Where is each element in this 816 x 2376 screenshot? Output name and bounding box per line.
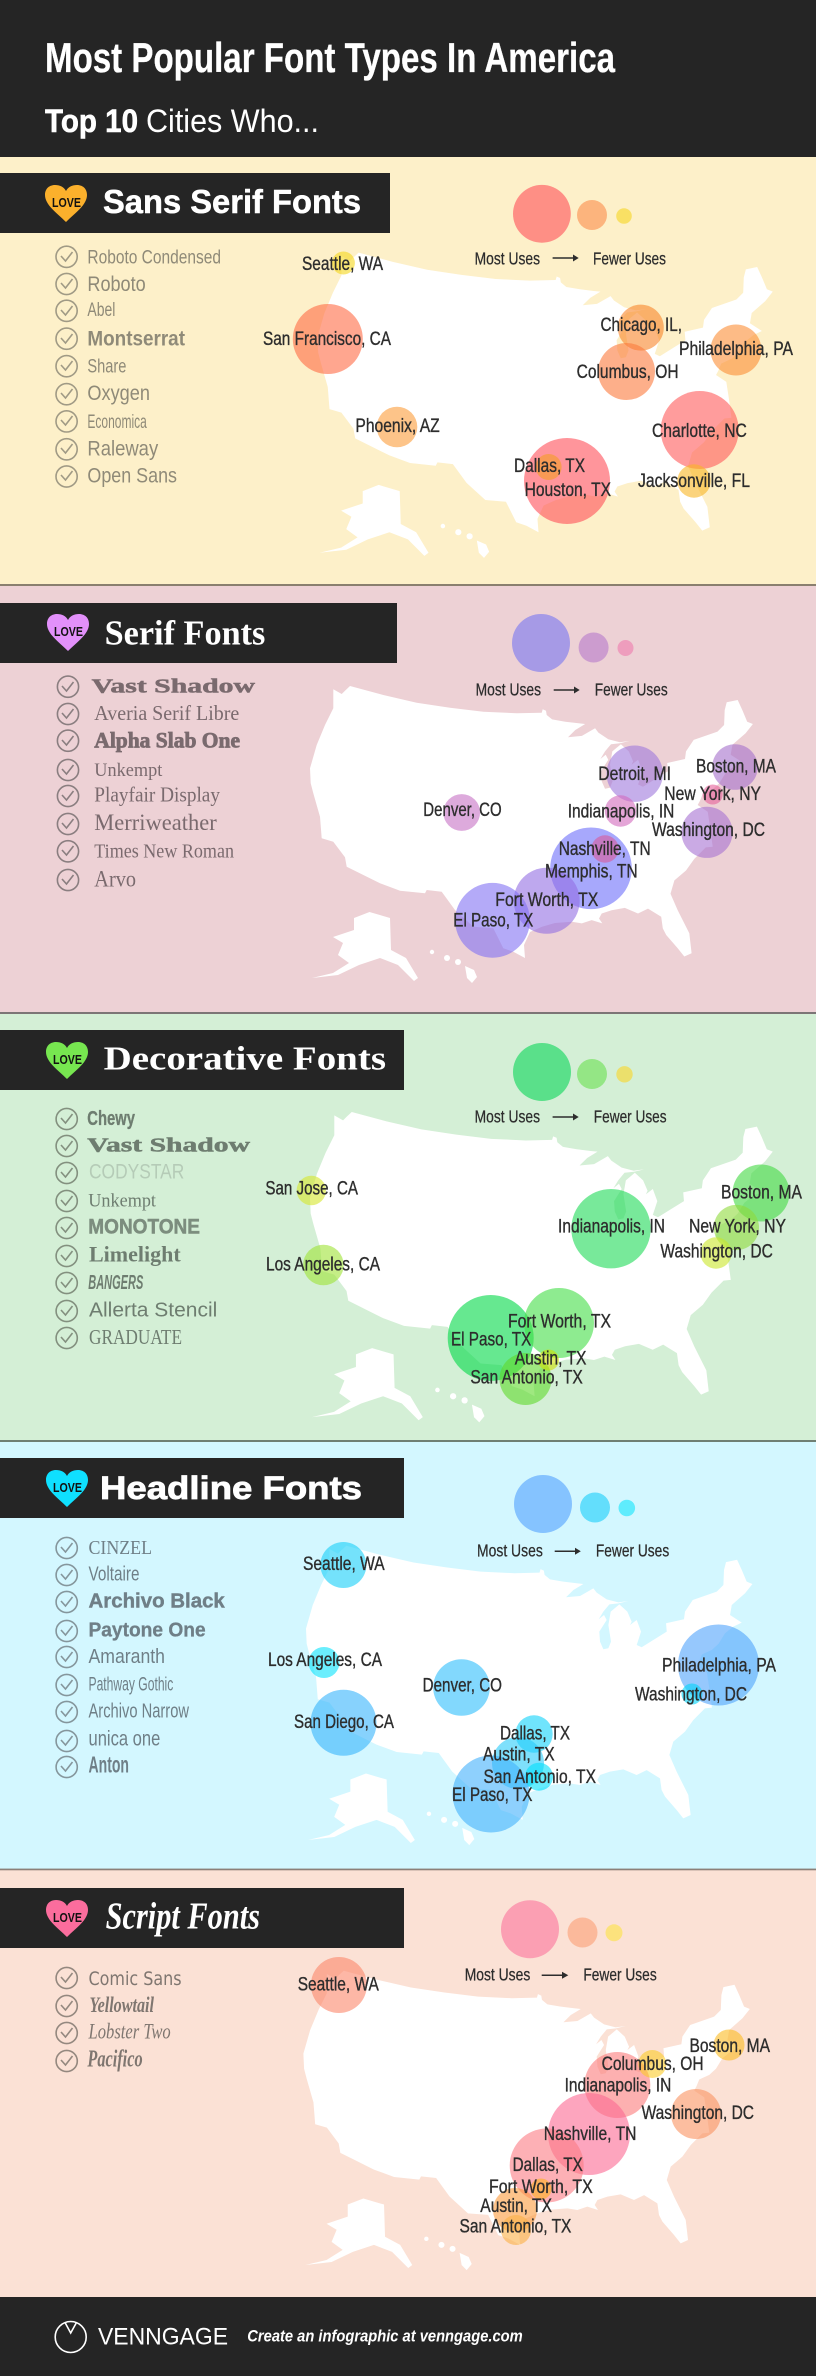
city labels: San Francisco, CA	[263, 328, 391, 350]
brand name: VENNGAGE	[98, 2324, 228, 2350]
font checklist: Chewy	[87, 1108, 136, 1130]
font checklist: unica one	[88, 1728, 160, 1751]
heading bar	[0, 1030, 404, 1090]
font checklist: Pathway Gothic	[88, 1675, 173, 1696]
legend: Most Uses	[475, 248, 540, 268]
heading bar: Decorative Fonts	[104, 1040, 386, 1077]
font checklist: Abel	[87, 300, 115, 321]
heading bar: Serif Fonts	[105, 613, 265, 652]
heading bar: LOVE	[53, 1480, 82, 1495]
city labels: Austin, TX	[483, 1744, 555, 1766]
city labels: Denver, CO	[423, 799, 502, 821]
font checklist	[56, 1537, 226, 1778]
city labels: Fort Worth, TX	[508, 1311, 611, 1333]
font checklist: Paytone One	[88, 1620, 206, 1642]
heading bar	[0, 1888, 404, 1948]
font checklist: Vast Shadow	[87, 1135, 251, 1157]
panel: decorative fonts	[0, 1014, 816, 1442]
city labels: San Jose, CA	[265, 1177, 358, 1199]
legend: Most Uses	[477, 1541, 543, 1561]
city labels: Indianapolis, IN	[568, 801, 674, 823]
city labels: New York, NY	[664, 783, 761, 805]
header band	[0, 0, 816, 157]
font checklist: Unkempt	[94, 760, 163, 781]
footer	[0, 2297, 816, 2376]
heading bar	[0, 1458, 404, 1518]
panel: serif fonts	[0, 586, 816, 1014]
bubbles	[297, 1164, 790, 1405]
legend	[475, 185, 666, 268]
city labels: Los Angeles, CA	[268, 1649, 382, 1671]
heading bar	[0, 173, 390, 233]
heading bar: Sans Serif Fonts	[103, 183, 361, 220]
city labels: Indianapolis, IN	[558, 1216, 665, 1238]
city labels: Chicago, IL,	[600, 314, 682, 336]
legend	[475, 1043, 667, 1127]
bubbles	[311, 1957, 744, 2245]
city labels: Nashville, TN	[544, 2123, 636, 2145]
bubbles	[293, 252, 762, 524]
font checklist: Amaranth	[88, 1646, 165, 1668]
city labels: Washington, DC	[652, 819, 765, 841]
panel: script fonts	[0, 1869, 816, 2297]
city labels: Memphis, TN	[545, 860, 638, 882]
city labels: Washington, DC	[660, 1241, 773, 1263]
heading bar: LOVE	[53, 1052, 82, 1067]
font checklist: Roboto	[87, 273, 146, 296]
font checklist: Open Sans	[87, 465, 177, 488]
font checklist: Allerta Stencil	[89, 1300, 217, 1322]
font checklist: Comic Sans	[88, 1968, 182, 1990]
map: United States	[303, 1971, 750, 2270]
city labels: San Antonio, TX	[484, 1766, 596, 1788]
legend	[476, 614, 668, 699]
font checklist: BANGERS	[88, 1272, 144, 1294]
map: United States	[310, 686, 753, 983]
font checklist: Averia Serif Libre	[94, 701, 239, 725]
font checklist: Pacifico	[87, 2047, 143, 2073]
legend	[477, 1475, 669, 1561]
city labels: San Antonio, TX	[470, 1367, 583, 1389]
panel: sans serif fonts	[0, 157, 816, 586]
font checklist: CODYSTAR	[89, 1161, 184, 1184]
bubbles	[308, 1542, 759, 1832]
font checklist: CINZEL	[88, 1537, 152, 1559]
city labels: Washington, DC	[642, 2102, 754, 2124]
font checklist: GRADUATE	[89, 1325, 182, 1349]
city labels: Washington, DC	[635, 1684, 747, 1706]
city labels: El Paso, TX	[452, 1784, 532, 1806]
city labels: Denver, CO	[423, 1675, 502, 1697]
city labels: Los Angeles, CA	[266, 1254, 380, 1276]
font checklist	[57, 675, 256, 892]
font checklist: Roboto Condensed	[87, 247, 221, 268]
city labels: Austin, TX	[515, 1347, 586, 1369]
legend: Fewer Uses	[593, 248, 666, 268]
city labels: El Paso, TX	[453, 910, 533, 932]
city labels: Austin, TX	[480, 2195, 552, 2217]
city labels	[265, 1177, 802, 1389]
city labels: Philadelphia, PA	[662, 1655, 776, 1677]
font checklist: Times New Roman	[94, 840, 234, 862]
heading bar: LOVE	[54, 624, 83, 639]
city labels: Detroit, MI	[598, 763, 671, 785]
font checklist: Lobster Two	[88, 2018, 171, 2043]
city labels: El Paso, TX	[451, 1329, 531, 1351]
font checklist: Arvo	[94, 867, 136, 892]
font checklist: Archivo Black	[88, 1591, 226, 1613]
font checklist: Oxygen	[87, 382, 150, 405]
bubbles	[443, 744, 758, 958]
city labels: Fort Worth, TX	[489, 2176, 593, 2198]
city labels: Charlotte, NC	[652, 420, 747, 442]
heading bar: LOVE	[53, 1910, 82, 1925]
city labels: New York, NY	[689, 1216, 786, 1238]
legend	[465, 1900, 657, 1985]
font checklist: Alpha Slab One	[94, 727, 240, 752]
city labels: Columbus, OH	[577, 361, 679, 383]
heading bar: Headline Fonts	[100, 1470, 362, 1506]
city labels: Seattle, WA	[302, 253, 383, 275]
city labels: Columbus, OH	[602, 2053, 704, 2075]
legend: Most Uses	[475, 1107, 540, 1127]
footer call to action: Create an infographic at venngage.com	[247, 2327, 523, 2346]
city labels: Phoenix, AZ	[355, 415, 440, 437]
font checklist: Archivo Narrow	[88, 1701, 189, 1723]
city labels: Indianapolis, IN	[565, 2074, 671, 2096]
font checklist: Playfair Display	[94, 783, 220, 807]
city labels	[263, 253, 793, 501]
city labels: Jacksonville, FL	[638, 470, 750, 492]
city labels	[268, 1553, 776, 1806]
font checklist: Limelight	[89, 1242, 181, 1267]
map: United States	[317, 253, 773, 558]
city labels: Houston, TX	[525, 479, 611, 501]
legend: Fewer Uses	[595, 679, 668, 699]
map: United States	[306, 1546, 752, 1845]
title: Most Popular Font Types In America	[45, 34, 616, 81]
icon: venngage logo	[55, 2322, 86, 2352]
font checklist: Raleway	[87, 437, 159, 460]
font checklist: Merriweather	[94, 810, 217, 835]
font checklist: Economica	[87, 412, 147, 433]
city labels	[298, 1974, 770, 2238]
map: United States	[310, 1112, 773, 1422]
heading bar: Script Fonts	[106, 1895, 260, 1937]
font checklist: MONOTONE	[88, 1216, 200, 1239]
legend: Fewer Uses	[594, 1107, 667, 1127]
font checklist: Yellowtail	[90, 1992, 155, 2017]
font checklist	[56, 1108, 251, 1349]
legend: Most Uses	[465, 1965, 530, 1985]
font checklist	[56, 1967, 182, 2073]
heading bar: LOVE	[52, 195, 81, 210]
heading bar	[0, 603, 397, 663]
font checklist	[56, 246, 221, 488]
font checklist: Unkempt	[88, 1191, 157, 1212]
legend: Most Uses	[476, 679, 541, 699]
city labels: San Diego, CA	[294, 1711, 394, 1733]
city labels: Fort Worth, TX	[495, 889, 598, 911]
legend: Fewer Uses	[583, 1965, 657, 1985]
city labels: Boston, MA	[696, 756, 776, 778]
city labels: San Antonio, TX	[460, 2216, 571, 2238]
city labels: Nashville, TN	[559, 838, 651, 860]
city labels: Dallas, TX	[500, 1723, 570, 1745]
legend: Fewer Uses	[596, 1541, 669, 1561]
font checklist: Anton	[88, 1752, 129, 1778]
subtitle: Cities Who...	[146, 103, 319, 139]
city labels	[423, 756, 776, 932]
font checklist: Share	[87, 356, 126, 377]
city labels: Boston, MA	[690, 2035, 770, 2057]
font checklist: Voltaire	[88, 1564, 140, 1586]
font checklist: Montserrat	[87, 328, 185, 351]
city labels: Seattle, WA	[303, 1553, 385, 1575]
city labels: Dallas, TX	[514, 455, 585, 477]
subtitle: Top 10	[45, 103, 138, 139]
city labels: Seattle, WA	[298, 1974, 379, 1996]
panel: headline fonts	[0, 1442, 816, 1870]
city labels: Dallas, TX	[513, 2154, 583, 2176]
font checklist: Vast Shadow	[92, 675, 256, 697]
